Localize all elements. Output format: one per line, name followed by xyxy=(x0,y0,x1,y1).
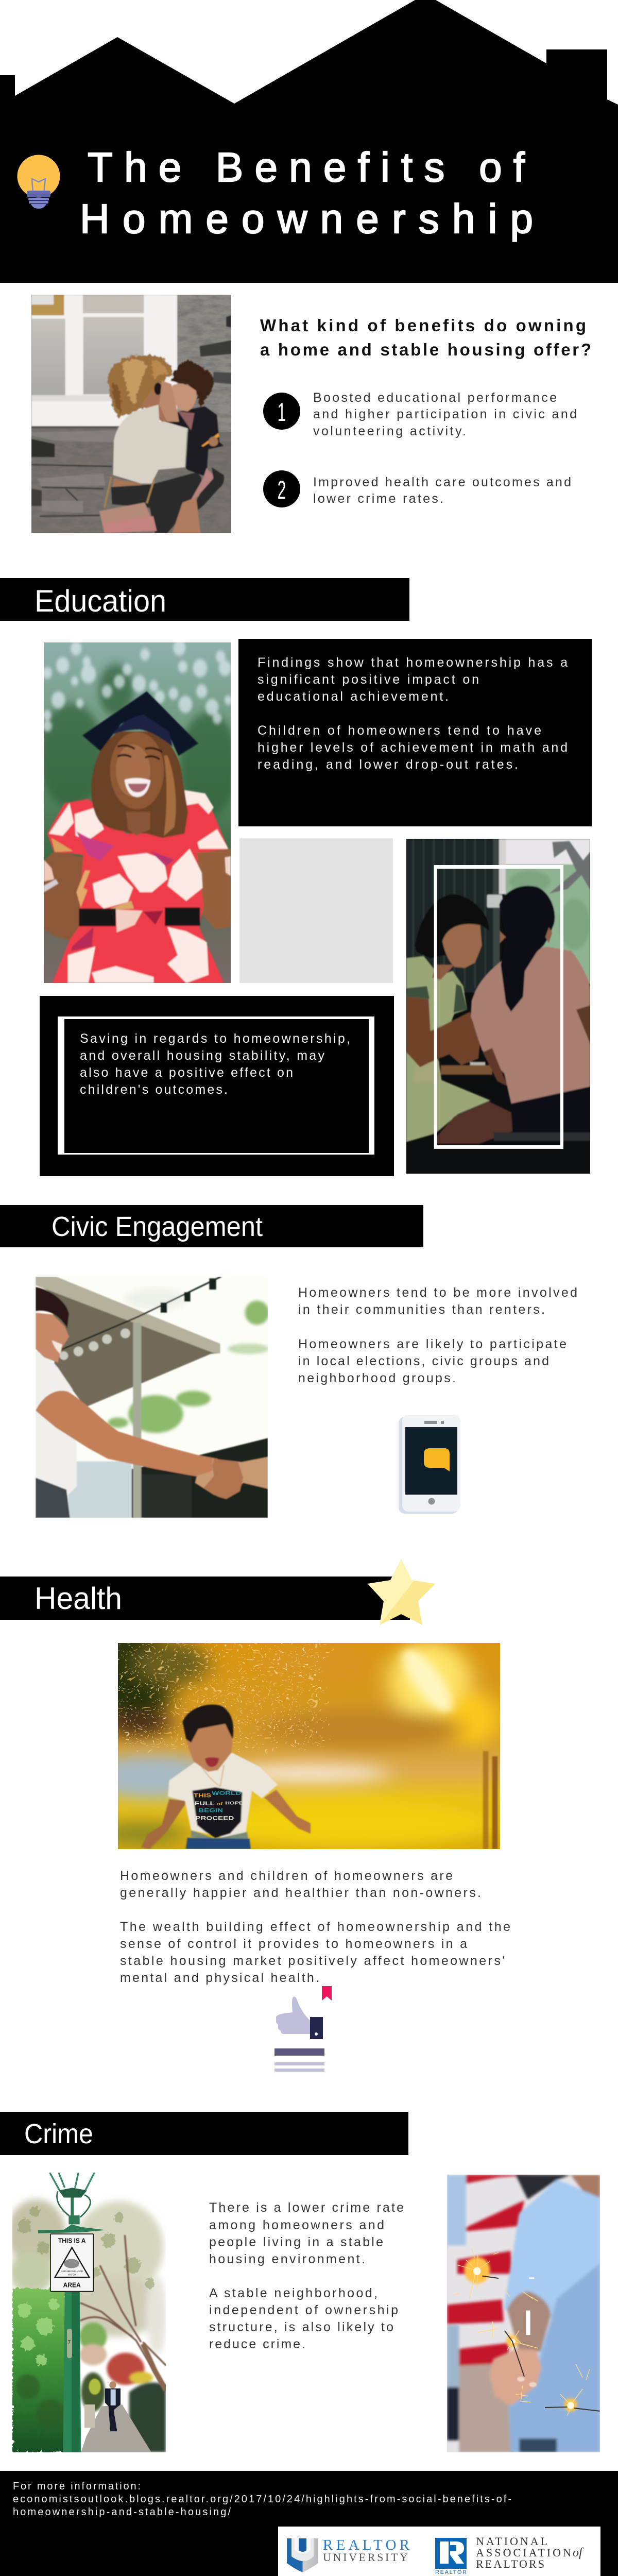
logo: National Association of Realtors: ASSOCIATION xyxy=(476,2546,571,2559)
benefit 1 text: and higher participation in civic and xyxy=(313,407,577,421)
photo: neighbourhood watch sign on lamp post: NEIGHBOURHOOD xyxy=(61,2270,83,2273)
logo: National Association of Realtors: REALTOR xyxy=(435,2569,467,2575)
question heading: a home and stable housing offer? xyxy=(260,340,591,359)
health text xyxy=(120,1869,510,1985)
photo: child running through sprinkler: WORLD xyxy=(212,1790,241,1796)
benefit 1 text xyxy=(313,391,577,438)
photo: child running through sprinkler: HOPE xyxy=(225,1801,243,1806)
dress xyxy=(47,790,228,983)
section heading: Education xyxy=(0,578,409,621)
logo: National Association of Realtors xyxy=(435,2535,584,2575)
title: Homeownership xyxy=(80,196,533,242)
panel: findings text box: significant positive impact on xyxy=(258,672,479,687)
white frame xyxy=(436,867,562,1147)
panel: saving text box: and overall housing stability, may xyxy=(80,1048,324,1063)
logo: National Association of Realtors: of xyxy=(573,2546,584,2560)
benefit 2 text: lower crime rates. xyxy=(313,492,443,506)
photo: neighbourhood watch sign on lamp post xyxy=(12,2173,166,2452)
benefit 1 text: volunteering activity. xyxy=(313,424,466,438)
section heading: Crime: Crime xyxy=(24,2119,93,2149)
sparkles xyxy=(464,2257,577,2412)
benefit 1: number badge xyxy=(263,393,300,430)
panel: saving text box: Saving in regards to homeownership, xyxy=(80,1031,350,1046)
question heading: What kind of benefits do owning xyxy=(260,316,586,335)
photo: child running through sprinkler: FULL xyxy=(195,1800,215,1806)
hair and face xyxy=(91,732,188,838)
benefit 1 text: Boosted educational performance xyxy=(313,391,557,405)
grey placeholder panel xyxy=(239,838,393,983)
section heading: Civic Engagement xyxy=(0,1205,423,1247)
photo: child holding sparklers xyxy=(447,2175,600,2452)
right woman xyxy=(471,946,590,1104)
crime text xyxy=(209,2200,404,2351)
photo: mother whispering to daughter xyxy=(31,295,231,533)
crime text: independent of ownership xyxy=(209,2303,398,2317)
footer band xyxy=(0,2471,618,2576)
panel: saving text box: children's outcomes. xyxy=(80,1082,228,1097)
footer source text xyxy=(13,2481,511,2518)
footer source text: homeownership-and-stable-housing/ xyxy=(13,2506,231,2518)
icon: thumbs up with bookmark xyxy=(274,1986,332,2072)
health text: sense of control it provides to homeowners in a xyxy=(120,1937,467,1951)
icon: light bulb xyxy=(18,155,60,209)
crime text: There is a lower crime rate xyxy=(209,2200,404,2215)
crime text: structure, is also likely to xyxy=(209,2320,393,2334)
crime text: among homeowners and xyxy=(209,2218,384,2232)
crime text: A stable neighborhood, xyxy=(209,2286,377,2300)
photo: child running through sprinkler: BEGIN xyxy=(198,1807,223,1814)
photo: child running through sprinkler: PROCEED xyxy=(195,1815,234,1821)
man xyxy=(105,2388,121,2431)
x ribbon xyxy=(549,841,590,894)
logo: National Association of Realtors: NATIONAL xyxy=(476,2535,547,2548)
woman xyxy=(108,355,173,417)
footer source text: economistsoutlook.blogs.realtor.org/2017/10/24/highlights-from-social-benefits-of- xyxy=(13,2494,511,2505)
logo: Realtor University: REALTOR xyxy=(323,2537,410,2553)
photo: neighbourhood watch sign on lamp post: AREA xyxy=(63,2281,81,2289)
health text: generally happier and healthier than non-owners. xyxy=(120,1886,481,1900)
benefit 2: number badge xyxy=(263,470,300,507)
hands xyxy=(195,1457,268,1498)
panel: findings text box: reading, and lower drop-out rates. xyxy=(258,757,518,772)
section heading: Health: Health xyxy=(35,1581,122,1616)
boy xyxy=(141,1799,187,1849)
health text: stable housing market positively affect homeowners' xyxy=(120,1954,505,1968)
section heading: Health xyxy=(0,1577,410,1620)
branches xyxy=(80,2235,166,2390)
footer source text: For more information: xyxy=(13,2481,141,2492)
crime text: people living in a stable xyxy=(209,2235,383,2249)
dark building xyxy=(132,1438,268,1518)
photo: handshake xyxy=(36,1277,268,1518)
awning xyxy=(36,1277,220,1407)
photo: neighbourhood watch sign on lamp post: WATCH xyxy=(68,2273,76,2276)
panel: saving text box: also have a positive effect on xyxy=(80,1065,293,1080)
photo: neighbourhood watch sign on lamp post: THIS IS A xyxy=(58,2237,86,2244)
bag xyxy=(105,477,154,507)
civic text: Homeowners are likely to participate xyxy=(298,1337,566,1351)
left woman xyxy=(406,956,490,1142)
lamp xyxy=(38,2224,106,2233)
lights xyxy=(61,1277,221,1350)
panel: findings text box xyxy=(238,639,592,826)
logo: Realtor University: UNIVERSITY xyxy=(323,2551,408,2564)
health text: mental and physical health. xyxy=(120,1971,319,1985)
photo: child running through sprinkler: THIS xyxy=(194,1792,211,1799)
crime text: housing environment. xyxy=(209,2252,365,2266)
photo: child running through sprinkler: of xyxy=(217,1802,223,1806)
photo: child running through sprinkler xyxy=(118,1643,500,1849)
photo: two women at a window xyxy=(406,839,590,1174)
photo: graduate xyxy=(44,642,231,983)
panel: findings text box: Children of homeowners tend to have xyxy=(258,723,541,738)
question heading xyxy=(260,316,591,359)
civic text: neighborhood groups. xyxy=(298,1371,456,1385)
logo: Realtor University xyxy=(287,2537,410,2572)
arms xyxy=(44,851,85,942)
title xyxy=(80,144,533,242)
benefit 1: number badge: 1 xyxy=(278,398,286,427)
sign xyxy=(50,2234,93,2292)
icon: star xyxy=(368,1559,435,1625)
panel: findings text box: educational achievement. xyxy=(258,689,449,704)
logo: National Association of Realtors: REALTORS xyxy=(476,2557,544,2570)
civic text: in local elections, civic groups and xyxy=(298,1354,549,1368)
title: The Benefits of xyxy=(88,144,525,190)
woman xyxy=(36,1350,77,1495)
post xyxy=(63,2292,81,2452)
header: house silhouette xyxy=(0,0,618,283)
icon: smartphone with speech bubble xyxy=(399,1415,460,1514)
civic text: Homeowners tend to be more involved xyxy=(298,1285,577,1300)
section heading: Civic Engagement: Civic Engagement xyxy=(52,1211,263,1242)
health text: Homeowners and children of homeowners are xyxy=(120,1869,453,1883)
girl xyxy=(165,406,224,477)
health text: The wealth building effect of homeownership and the xyxy=(120,1920,510,1934)
panel: saving text box xyxy=(40,996,394,1176)
table xyxy=(441,1065,492,1075)
panel: findings text box: Findings show that homeownership has a xyxy=(258,655,568,670)
benefit 2 text xyxy=(313,475,571,506)
panel: findings text box: higher levels of achievement in math and xyxy=(258,740,568,755)
civic text: in their communities than renters. xyxy=(298,1302,545,1317)
crime text: reduce crime. xyxy=(209,2337,305,2351)
cap xyxy=(82,691,198,756)
section heading: Crime xyxy=(0,2112,408,2155)
benefit 2 text: Improved health care outcomes and xyxy=(313,475,571,489)
civic text xyxy=(298,1285,577,1385)
section heading: Education: Education xyxy=(35,584,166,618)
benefit 2: number badge: 2 xyxy=(278,476,286,504)
photo: neighbourhood watch sign on lamp post: 7 xyxy=(67,2339,71,2346)
logo panel xyxy=(278,2527,600,2576)
